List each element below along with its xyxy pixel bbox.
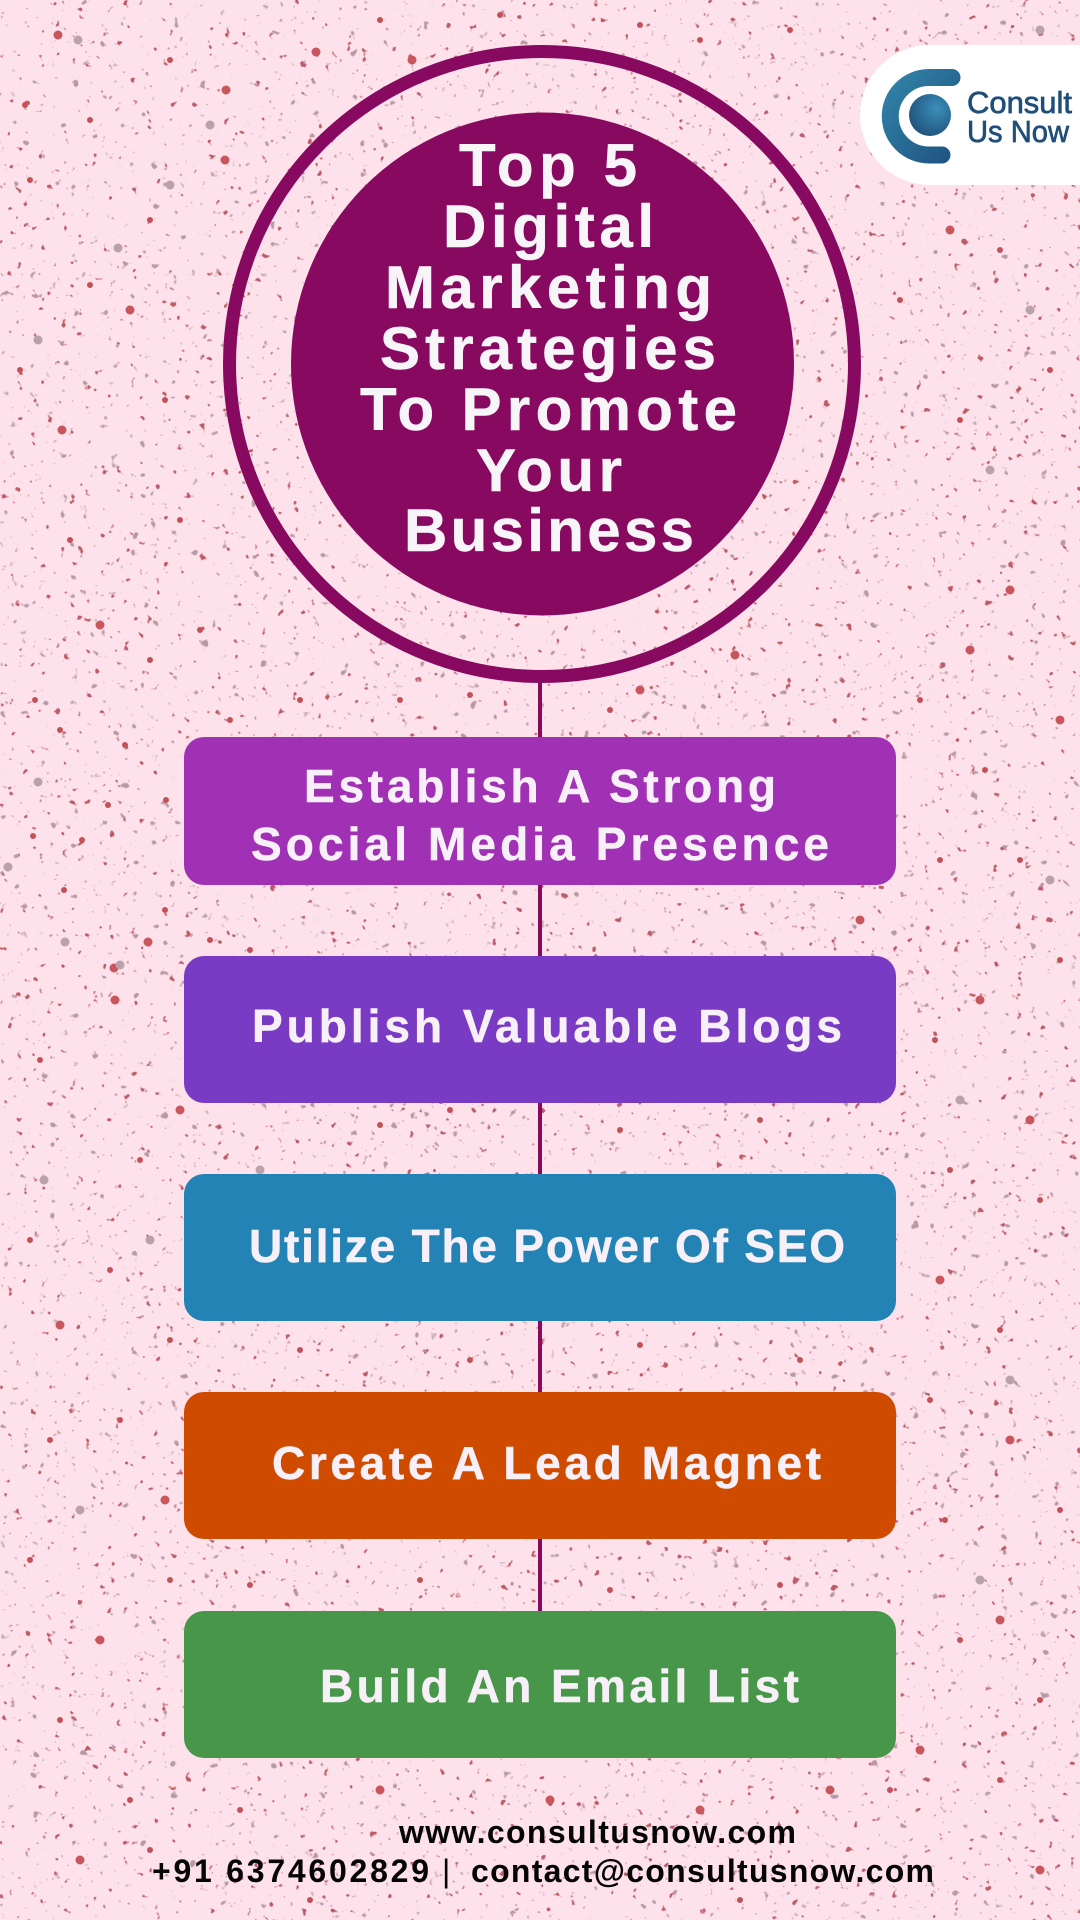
- step 2: blogs: Publish Valuable Blogs: [252, 1000, 842, 1052]
- step 3: SEO: Utilize The Power Of SEO: [249, 1220, 845, 1272]
- footer contact: contact@consultusnow.com: [471, 1853, 934, 1889]
- step 1: social media: [184, 737, 896, 885]
- logo text: Consult: [967, 85, 1072, 120]
- logo badge: [860, 45, 1080, 185]
- inner circle: [291, 112, 794, 616]
- footer contact: |: [442, 1853, 450, 1889]
- title: Top 5: [459, 132, 637, 199]
- title: [360, 132, 737, 564]
- title: Strategies: [380, 315, 716, 382]
- footer contact: [152, 1814, 934, 1889]
- icon: logo C: [890, 78, 952, 155]
- title: Your: [476, 437, 622, 504]
- step 4: lead magnet: Create A Lead Magnet: [272, 1437, 821, 1489]
- title: Digital: [443, 193, 654, 260]
- step 1: social media: Establish A Strong: [304, 760, 776, 812]
- title ring and circle: [230, 52, 854, 676]
- step 1: social media: Social Media Presence: [251, 818, 829, 870]
- title: Marketing: [385, 254, 712, 321]
- footer contact: www.consultusnow.com: [398, 1814, 796, 1850]
- title: Business: [404, 497, 694, 564]
- outer ring: [230, 52, 854, 676]
- icon: logo ball: [909, 94, 951, 136]
- step 5: email list: Build An Email List: [320, 1660, 799, 1712]
- connector line: [538, 682, 542, 1612]
- step 3: SEO: [184, 1174, 896, 1321]
- step 5: email list: [184, 1611, 896, 1758]
- step 4: lead magnet: [184, 1392, 896, 1539]
- logo text: [967, 85, 1072, 149]
- step 2: blogs: [184, 956, 896, 1103]
- title: To Promote: [360, 376, 737, 443]
- logo text: Us Now: [967, 114, 1070, 149]
- footer contact: +91 6374602829: [152, 1853, 429, 1889]
